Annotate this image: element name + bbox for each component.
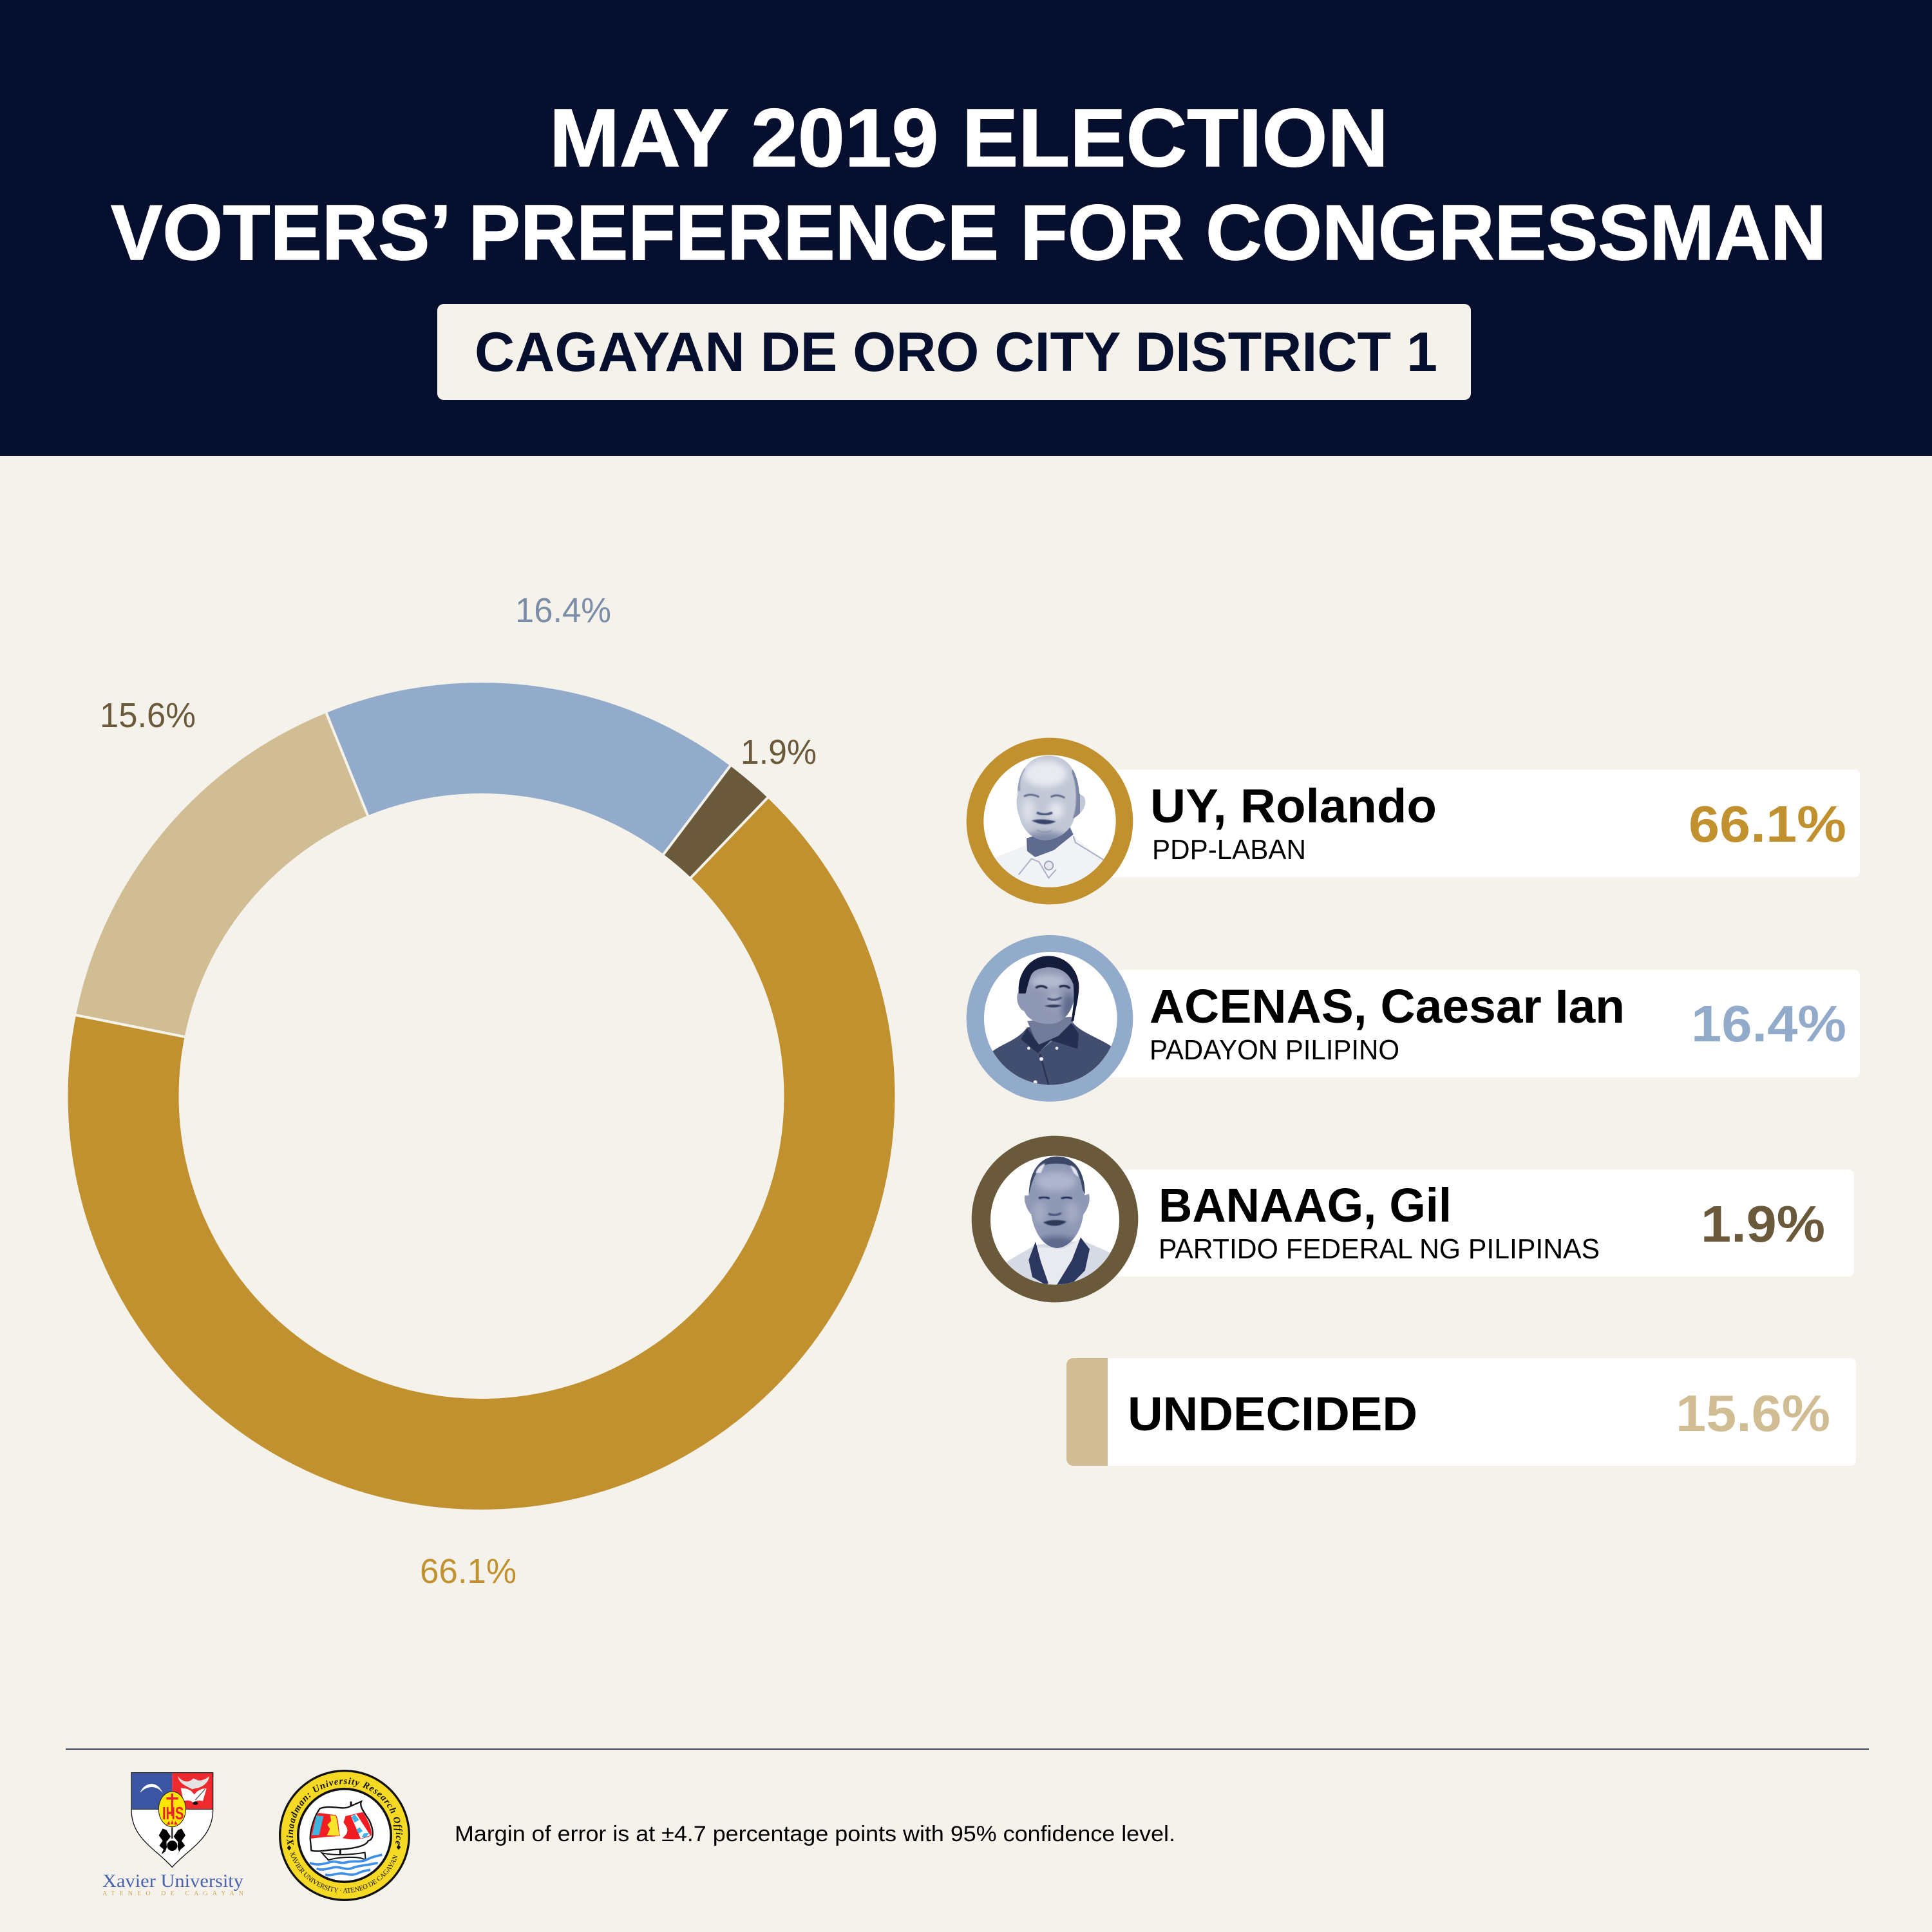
percentage: 1.9% (1701, 1195, 1825, 1253)
seal bottom text: XAVIER UNIVERSITY · ATENEO DE CAGAYAN (290, 1851, 398, 1893)
donut label 1.9%: 1.9% (741, 733, 817, 772)
card (1066, 1358, 1856, 1466)
slice: Banaag 1.9% (663, 765, 768, 878)
icon: shield (131, 1773, 213, 1867)
percentage: 66.1% (1689, 795, 1846, 853)
subtitle pill (437, 304, 1471, 400)
logo: Kinaadman University Research Office seal (279, 1770, 410, 1901)
party: PADAYON PILIPINO (1150, 1034, 1399, 1066)
donut label 16.4%: 16.4% (515, 591, 611, 630)
donut chart (67, 681, 896, 1511)
icon: portrait of Uy (967, 738, 1133, 904)
icon: sail (310, 1801, 373, 1860)
candidate name: UY, Rolando (1150, 779, 1437, 833)
donut label 15.6%: 15.6% (100, 696, 196, 735)
percentage: 15.6% (1676, 1385, 1830, 1442)
card (1095, 1170, 1854, 1276)
icon: portrait of Acenas (967, 935, 1133, 1102)
label: UNDECIDED (1128, 1387, 1417, 1441)
icon: shield: IHS (162, 1803, 184, 1823)
candidate row: Banaag (972, 1136, 1854, 1302)
colour key bar (1066, 1358, 1108, 1466)
slice: Uy 66.1% (67, 797, 896, 1511)
icon: portrait of Banaag (972, 1136, 1138, 1302)
candidate row: Acenas (967, 935, 1860, 1102)
icon: waves (310, 1855, 382, 1875)
seal top text: Xinaadman: University Research Office (286, 1777, 403, 1846)
row: undecided (1066, 1358, 1856, 1466)
header band (0, 0, 1932, 456)
candidate name: ACENAS, Caesar Ian (1150, 980, 1625, 1033)
donut label 66.1%: 66.1% (420, 1552, 516, 1591)
candidate name: BANAAG, Gil (1159, 1179, 1452, 1232)
subtitle pill: CAGAYAN DE ORO CITY DISTRICT 1 (475, 321, 1437, 383)
party: PDP-LABAN (1152, 834, 1306, 866)
party: PARTIDO FEDERAL NG PILIPINAS (1159, 1233, 1600, 1265)
slice: Acenas 16.4% (326, 681, 731, 855)
percentage: 16.4% (1691, 995, 1846, 1052)
wordmark: Xavier University (102, 1871, 244, 1891)
candidate row: Uy (967, 738, 1860, 904)
footnote: margin of error: Margin of error is at ±4.7 percentage points with 95% confidence level. (455, 1822, 1175, 1846)
logo: Xavier University (102, 1773, 244, 1897)
title line 1: MAY 2019 ELECTION (549, 92, 1388, 184)
card (1095, 770, 1860, 877)
title line 2: VOTERS’ PREFERENCE FOR CONGRESSMAN (111, 189, 1826, 276)
slice: undecided 15.6% (75, 712, 368, 1037)
tagline: ATENEO DE CAGAYAN (102, 1890, 243, 1897)
card (1095, 970, 1860, 1077)
